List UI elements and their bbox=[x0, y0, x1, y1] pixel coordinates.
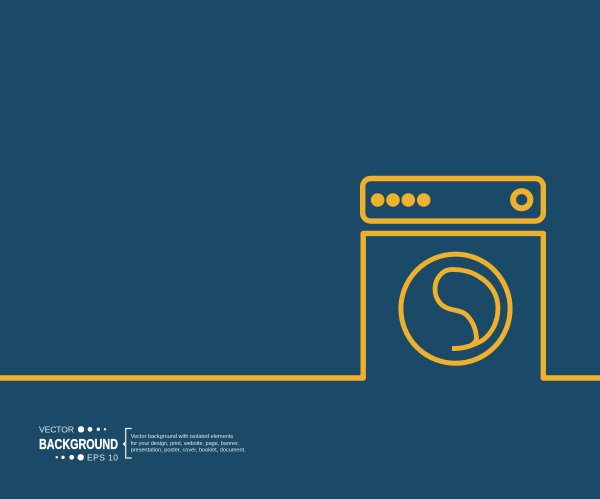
description text bbox=[131, 434, 246, 454]
washing machine body outline and baseline bbox=[0, 233, 600, 378]
bracket pointer bbox=[122, 442, 125, 446]
control knob bbox=[513, 191, 530, 208]
description text: for your design, print, website, page, banner, bbox=[131, 441, 240, 447]
description text: Vector background with isolated elements bbox=[131, 434, 233, 440]
bracket bbox=[126, 428, 132, 458]
control buttons bbox=[371, 193, 431, 207]
logo: vector background eps 10 bbox=[39, 424, 246, 462]
icon: washing machine with baseline bbox=[0, 178, 600, 378]
drum swirl bbox=[435, 270, 498, 349]
lower decorative dots bbox=[56, 454, 84, 460]
logo word VECTOR: VECTOR bbox=[39, 424, 74, 434]
logo word BACKGROUND: BACKGROUND bbox=[39, 436, 118, 453]
upper decorative dots bbox=[78, 426, 106, 432]
logo word EPS 10: EPS 10 bbox=[87, 452, 118, 462]
washing machine control panel bbox=[363, 178, 543, 221]
drum door circle bbox=[401, 254, 510, 363]
description text: presentation, poster, cover, booklet, document. bbox=[131, 448, 246, 454]
